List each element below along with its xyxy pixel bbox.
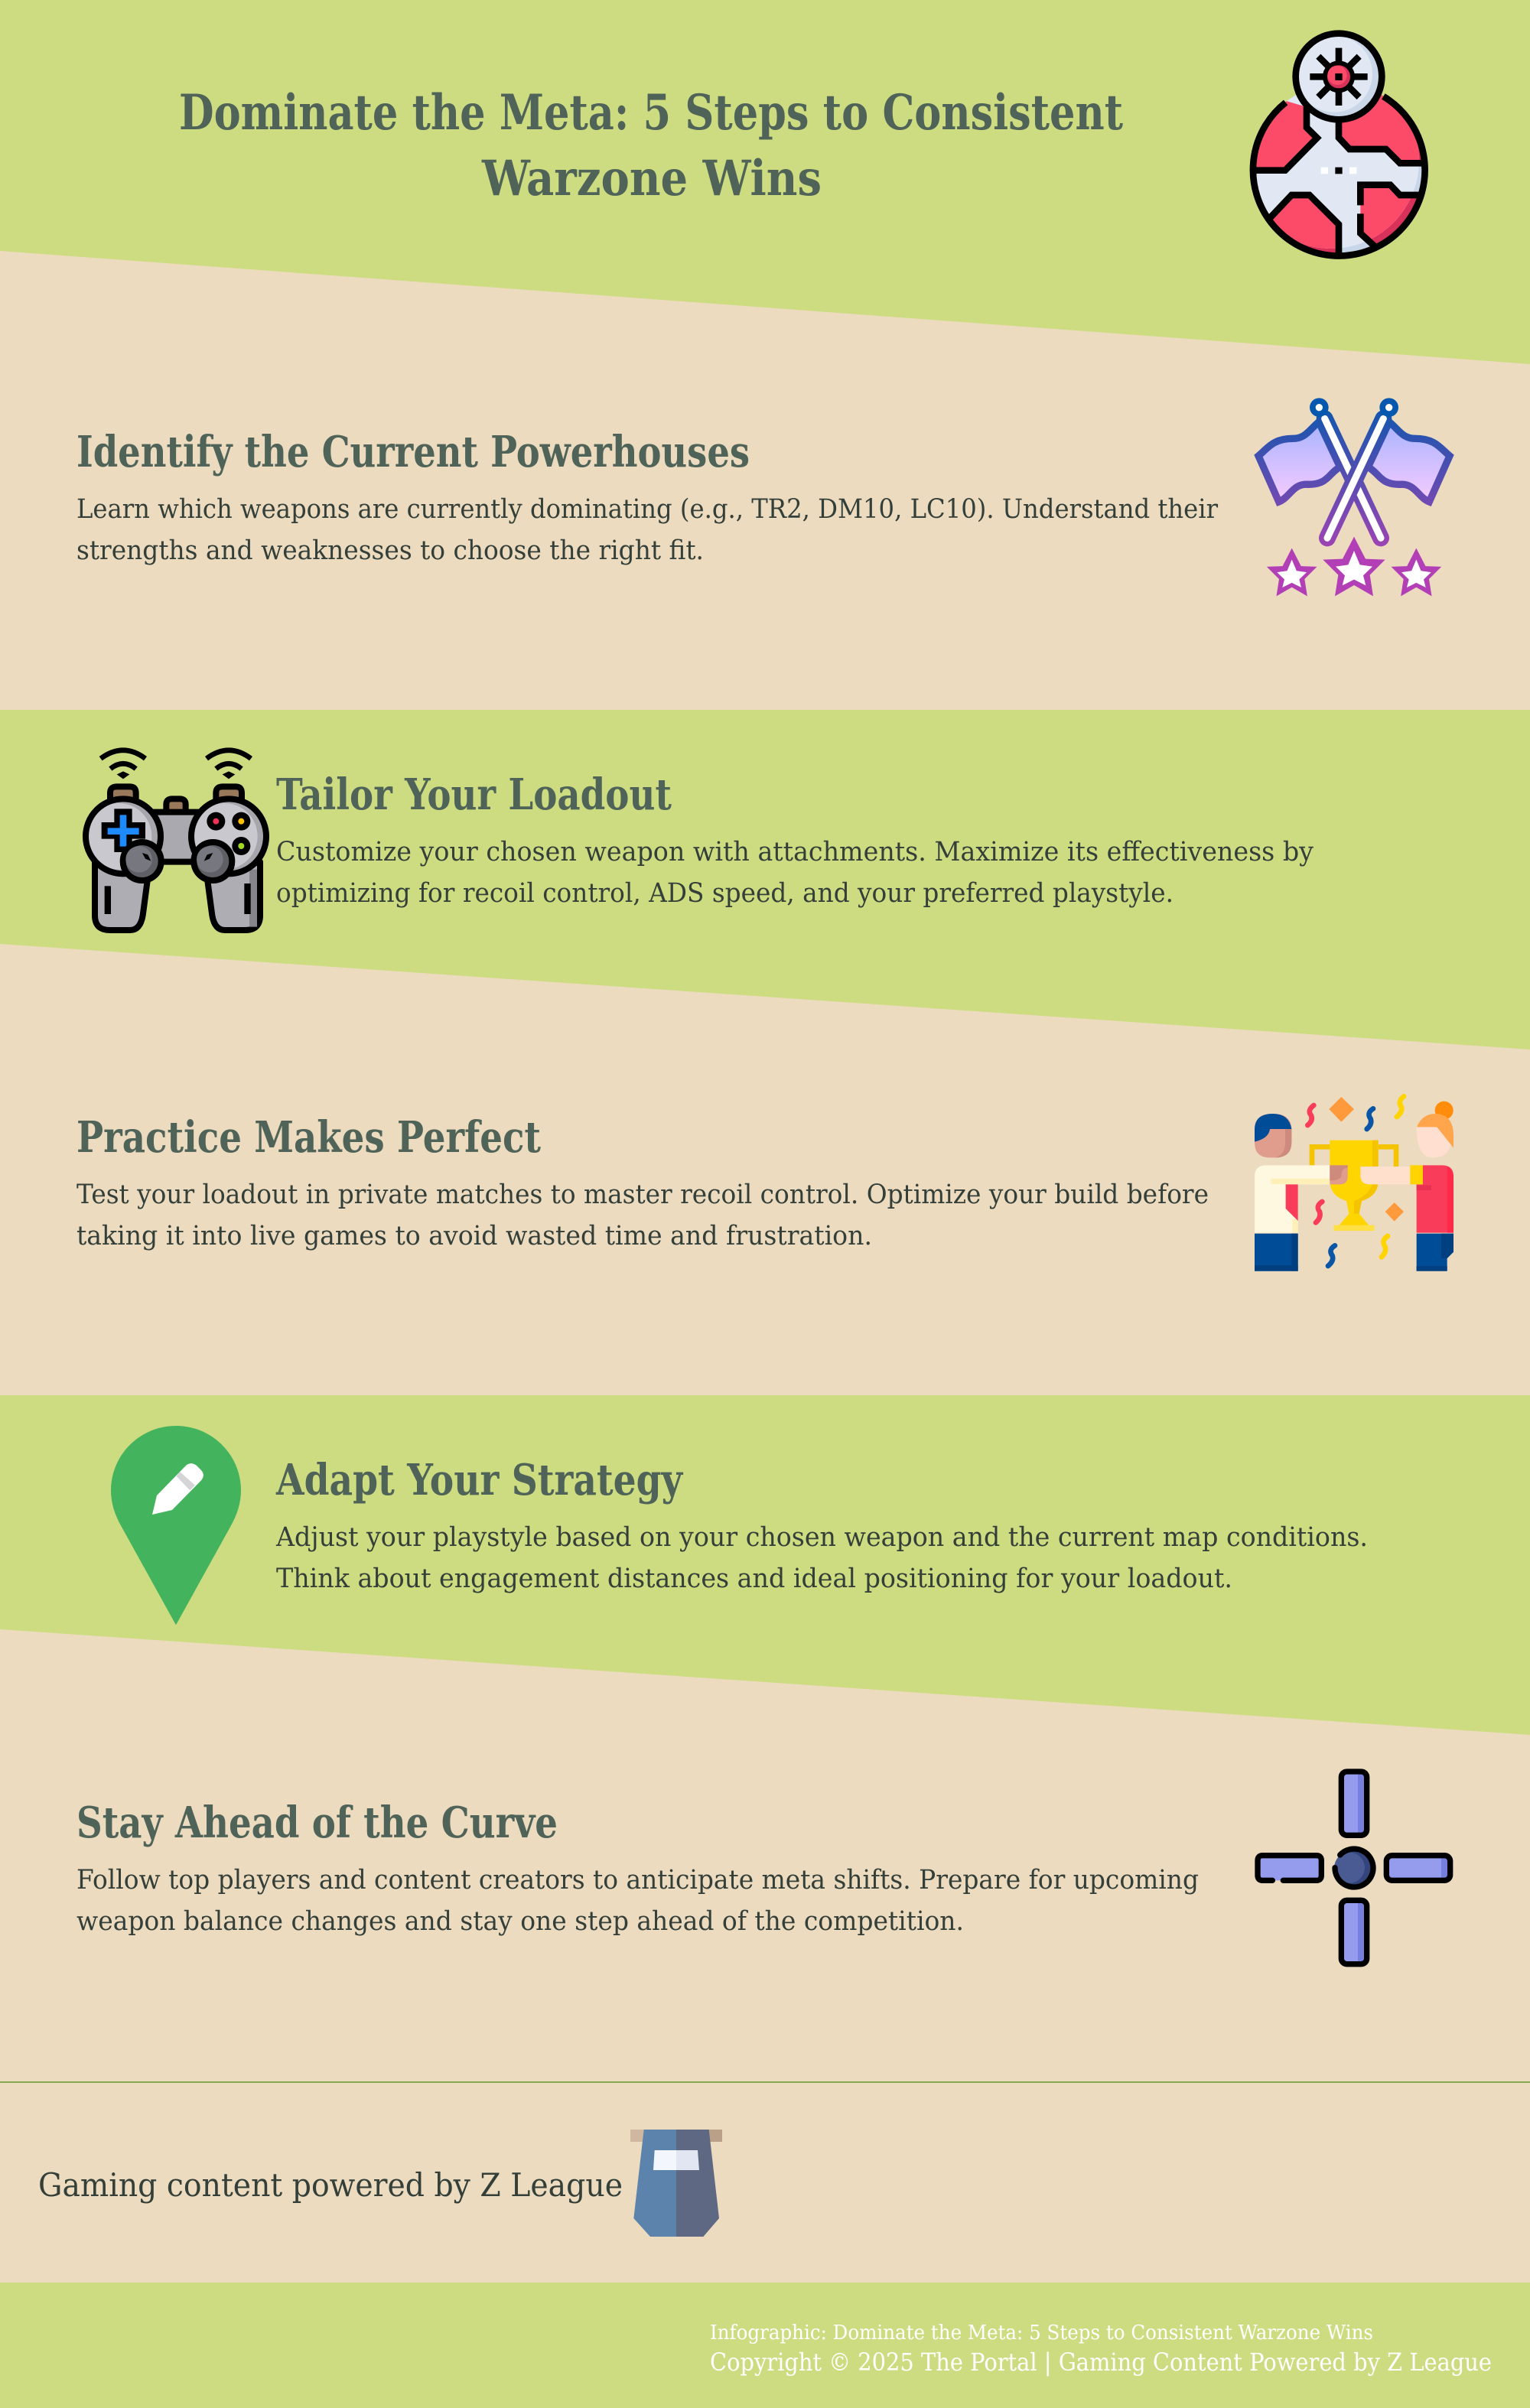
panel: footer band <box>0 2283 1530 2408</box>
panel: step 5 text <box>76 1798 1199 1937</box>
panel: step 1 text: Learn which weapons are currently dominating (e.g., TR2, DM10, LC10). Understand their <box>76 494 1218 525</box>
panel: step 2 text: optimizing for recoil control, ADS speed, and your preferred playstyle. <box>276 878 1174 909</box>
panel: step 5 text: weapon balance changes and stay one step ahead of the competition. <box>76 1906 964 1937</box>
icon: map pin with pencil <box>111 1426 241 1625</box>
icon: banner shield <box>630 2130 722 2237</box>
panel: step 4 text: Adapt Your Strategy <box>275 1455 683 1505</box>
title <box>179 84 1123 207</box>
panel: step 5 text: Stay Ahead of the Curve <box>76 1798 558 1848</box>
panel: header band <box>0 0 1530 364</box>
panel: step 2 text: Tailor Your Loadout <box>276 770 672 820</box>
panel: step 4 band <box>0 1395 1530 1735</box>
panel: step 2 text <box>276 770 1314 909</box>
panel: step 2 band <box>0 710 1530 1049</box>
panel: step 1 text <box>76 427 1218 566</box>
panel: step 2 text: Customize your chosen weapon with attachments. Maximize its effectiveness by <box>276 837 1314 867</box>
divider line <box>0 2081 1530 2083</box>
brand text: Gaming content powered by Z League <box>38 2166 623 2204</box>
icon: players with trophy <box>1255 1096 1454 1271</box>
panel: step 1 text: strengths and weaknesses to choose the right fit. <box>76 535 704 566</box>
icon: crosshair <box>1258 1772 1450 1964</box>
footer text: Infographic: Dominate the Meta: 5 Steps to Consistent Warzone Wins <box>710 2322 1373 2345</box>
icon: game controller <box>86 750 266 930</box>
footer text <box>710 2322 1492 2377</box>
panel: step 5 text: Follow top players and content creators to anticipate meta shifts. Prepare for upcoming <box>76 1865 1199 1895</box>
panel: step 3 text: taking it into live games to avoid wasted time and frustration. <box>76 1221 872 1251</box>
icon: crossed flags and stars <box>1258 398 1450 596</box>
panel: step 1 text: Identify the Current Powerhouses <box>76 427 750 477</box>
panel: step 3 text: Practice Makes Perfect <box>76 1112 541 1163</box>
panel: step 4 text: Adjust your playstyle based on your chosen weapon and the current map conditions. <box>275 1522 1368 1553</box>
panel: step 4 text: Think about engagement distances and ideal positioning for your loadout. <box>276 1564 1232 1594</box>
title: Warzone Wins <box>481 150 822 207</box>
icon: globe with virus <box>1245 34 1436 268</box>
panel: step 4 text <box>275 1455 1368 1594</box>
title: Dominate the Meta: 5 Steps to Consistent <box>179 84 1123 142</box>
panel: step 3 text <box>76 1112 1209 1251</box>
panel: step 3 text: Test your loadout in private matches to master recoil control. Optimize your build before <box>76 1180 1209 1210</box>
